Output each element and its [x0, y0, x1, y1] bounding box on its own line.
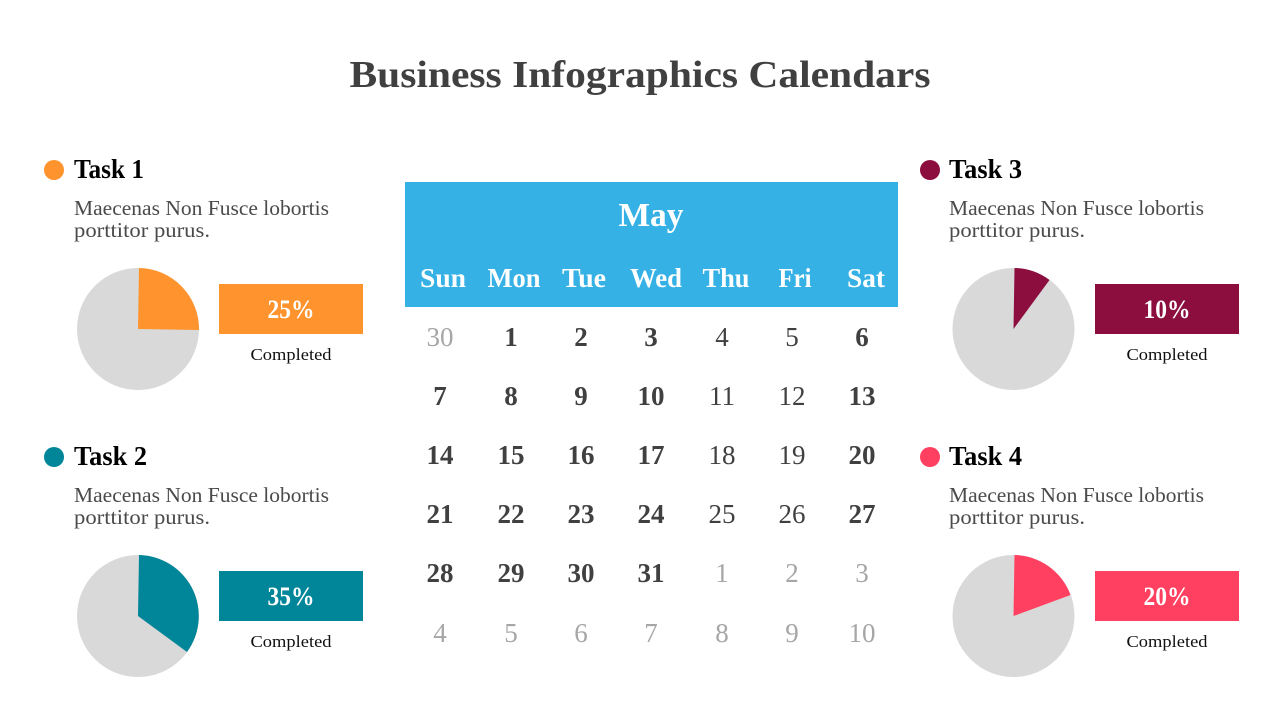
calendar dates: 16 [568, 440, 594, 470]
weekday labels: Sat [847, 263, 885, 293]
calendar dates: 9 [574, 381, 588, 411]
calendar dates: 6 [574, 618, 588, 648]
task 1 completed label: Completed [250, 345, 332, 364]
task 2 description: Maecenas Non Fusce lobortis [74, 483, 329, 507]
weekday labels: Thu [702, 263, 750, 293]
calendar dates: 7 [433, 381, 447, 411]
calendar dates: 25 [708, 499, 736, 529]
task 1 description [74, 196, 329, 242]
task 3 pie chart [952, 268, 1074, 390]
task 3 heading: Task 3 [949, 154, 1022, 184]
weekday labels [420, 263, 885, 293]
panel: task 4 [920, 441, 1239, 677]
task 1 percentage badge [219, 284, 363, 334]
task 1 marker [44, 160, 64, 180]
task 4 description [949, 483, 1204, 529]
calendar dates: 1 [715, 558, 729, 588]
task 2 percentage badge: 35% [268, 582, 314, 611]
calendar dates: 7 [644, 618, 658, 648]
calendar dates: 2 [785, 558, 799, 588]
calendar dates: 4 [715, 322, 729, 352]
panel: task 2 [44, 441, 363, 677]
task 2 description [74, 483, 329, 529]
calendar dates: 30 [568, 558, 594, 588]
task 2 marker [44, 447, 64, 467]
calendar dates: 27 [848, 499, 876, 529]
calendar dates: 13 [848, 381, 876, 411]
task 2 completed label: Completed [250, 632, 332, 651]
calendar dates: 17 [638, 440, 664, 470]
task 3 marker [920, 160, 940, 180]
calendar header [405, 182, 898, 307]
task 1 description: Maecenas Non Fusce lobortis [74, 196, 329, 220]
calendar dates: 30 [426, 322, 454, 352]
calendar dates: 3 [855, 558, 869, 588]
task 4 pie chart [952, 555, 1074, 677]
task 4 heading: Task 4 [949, 441, 1022, 471]
calendar dates: 12 [778, 381, 806, 411]
calendar dates: 19 [778, 440, 806, 470]
task 3 percentage badge [1095, 284, 1239, 334]
panel: task 3 [920, 154, 1239, 390]
calendar dates: 5 [504, 618, 518, 648]
calendar dates: 8 [715, 618, 729, 648]
task 3 description: Maecenas Non Fusce lobortis [949, 196, 1204, 220]
task 1 percentage badge: 25% [268, 295, 314, 324]
calendar dates: 29 [498, 558, 524, 588]
calendar dates: 28 [426, 558, 454, 588]
task 3 description: porttitor purus. [949, 218, 1085, 242]
task 1 description: porttitor purus. [74, 218, 210, 242]
calendar dates: 10 [638, 381, 664, 411]
calendar dates: 14 [426, 440, 454, 470]
calendar dates: 23 [568, 499, 594, 529]
weekday labels: Tue [562, 263, 606, 293]
task 1 heading: Task 1 [74, 154, 144, 184]
panel: calendar [405, 182, 898, 648]
task 4 description: Maecenas Non Fusce lobortis [949, 483, 1204, 507]
task 3 percentage badge: 10% [1144, 295, 1190, 324]
task 4 completed label: Completed [1126, 632, 1208, 651]
panel: task 1 [44, 154, 363, 390]
calendar dates: 3 [644, 322, 658, 352]
task 2 percentage badge [219, 571, 363, 621]
task 2 heading: Task 2 [74, 441, 147, 471]
calendar dates: 2 [574, 322, 588, 352]
title: Business Infographics Calendars [350, 54, 930, 96]
calendar dates: 5 [785, 322, 799, 352]
calendar dates: 15 [498, 440, 524, 470]
weekday labels: Wed [630, 263, 682, 293]
task 4 description: porttitor purus. [949, 505, 1085, 529]
task 3 description [949, 196, 1204, 242]
calendar dates: 26 [778, 499, 806, 529]
calendar dates: 11 [709, 381, 735, 411]
month name: May [618, 197, 684, 234]
calendar dates: 31 [638, 558, 664, 588]
weekday labels: Fri [778, 263, 812, 293]
calendar dates: 24 [638, 499, 664, 529]
calendar dates: 8 [504, 381, 518, 411]
task 3 completed label: Completed [1126, 345, 1208, 364]
calendar dates: 18 [708, 440, 736, 470]
calendar dates [426, 322, 876, 648]
calendar dates: 9 [785, 618, 799, 648]
weekday labels: Sun [420, 263, 466, 293]
task 2 description: porttitor purus. [74, 505, 210, 529]
calendar dates: 20 [848, 440, 876, 470]
calendar dates: 21 [426, 499, 454, 529]
calendar dates: 6 [855, 322, 869, 352]
task 4 marker [920, 447, 940, 467]
task 4 percentage badge: 20% [1144, 582, 1190, 611]
task 4 percentage badge [1095, 571, 1239, 621]
calendar dates: 22 [498, 499, 524, 529]
calendar dates: 4 [433, 618, 447, 648]
calendar dates: 10 [848, 618, 876, 648]
weekday labels: Mon [488, 263, 540, 293]
calendar dates: 1 [504, 322, 518, 352]
task 1 pie chart [77, 268, 199, 390]
task 2 pie chart [77, 555, 199, 677]
